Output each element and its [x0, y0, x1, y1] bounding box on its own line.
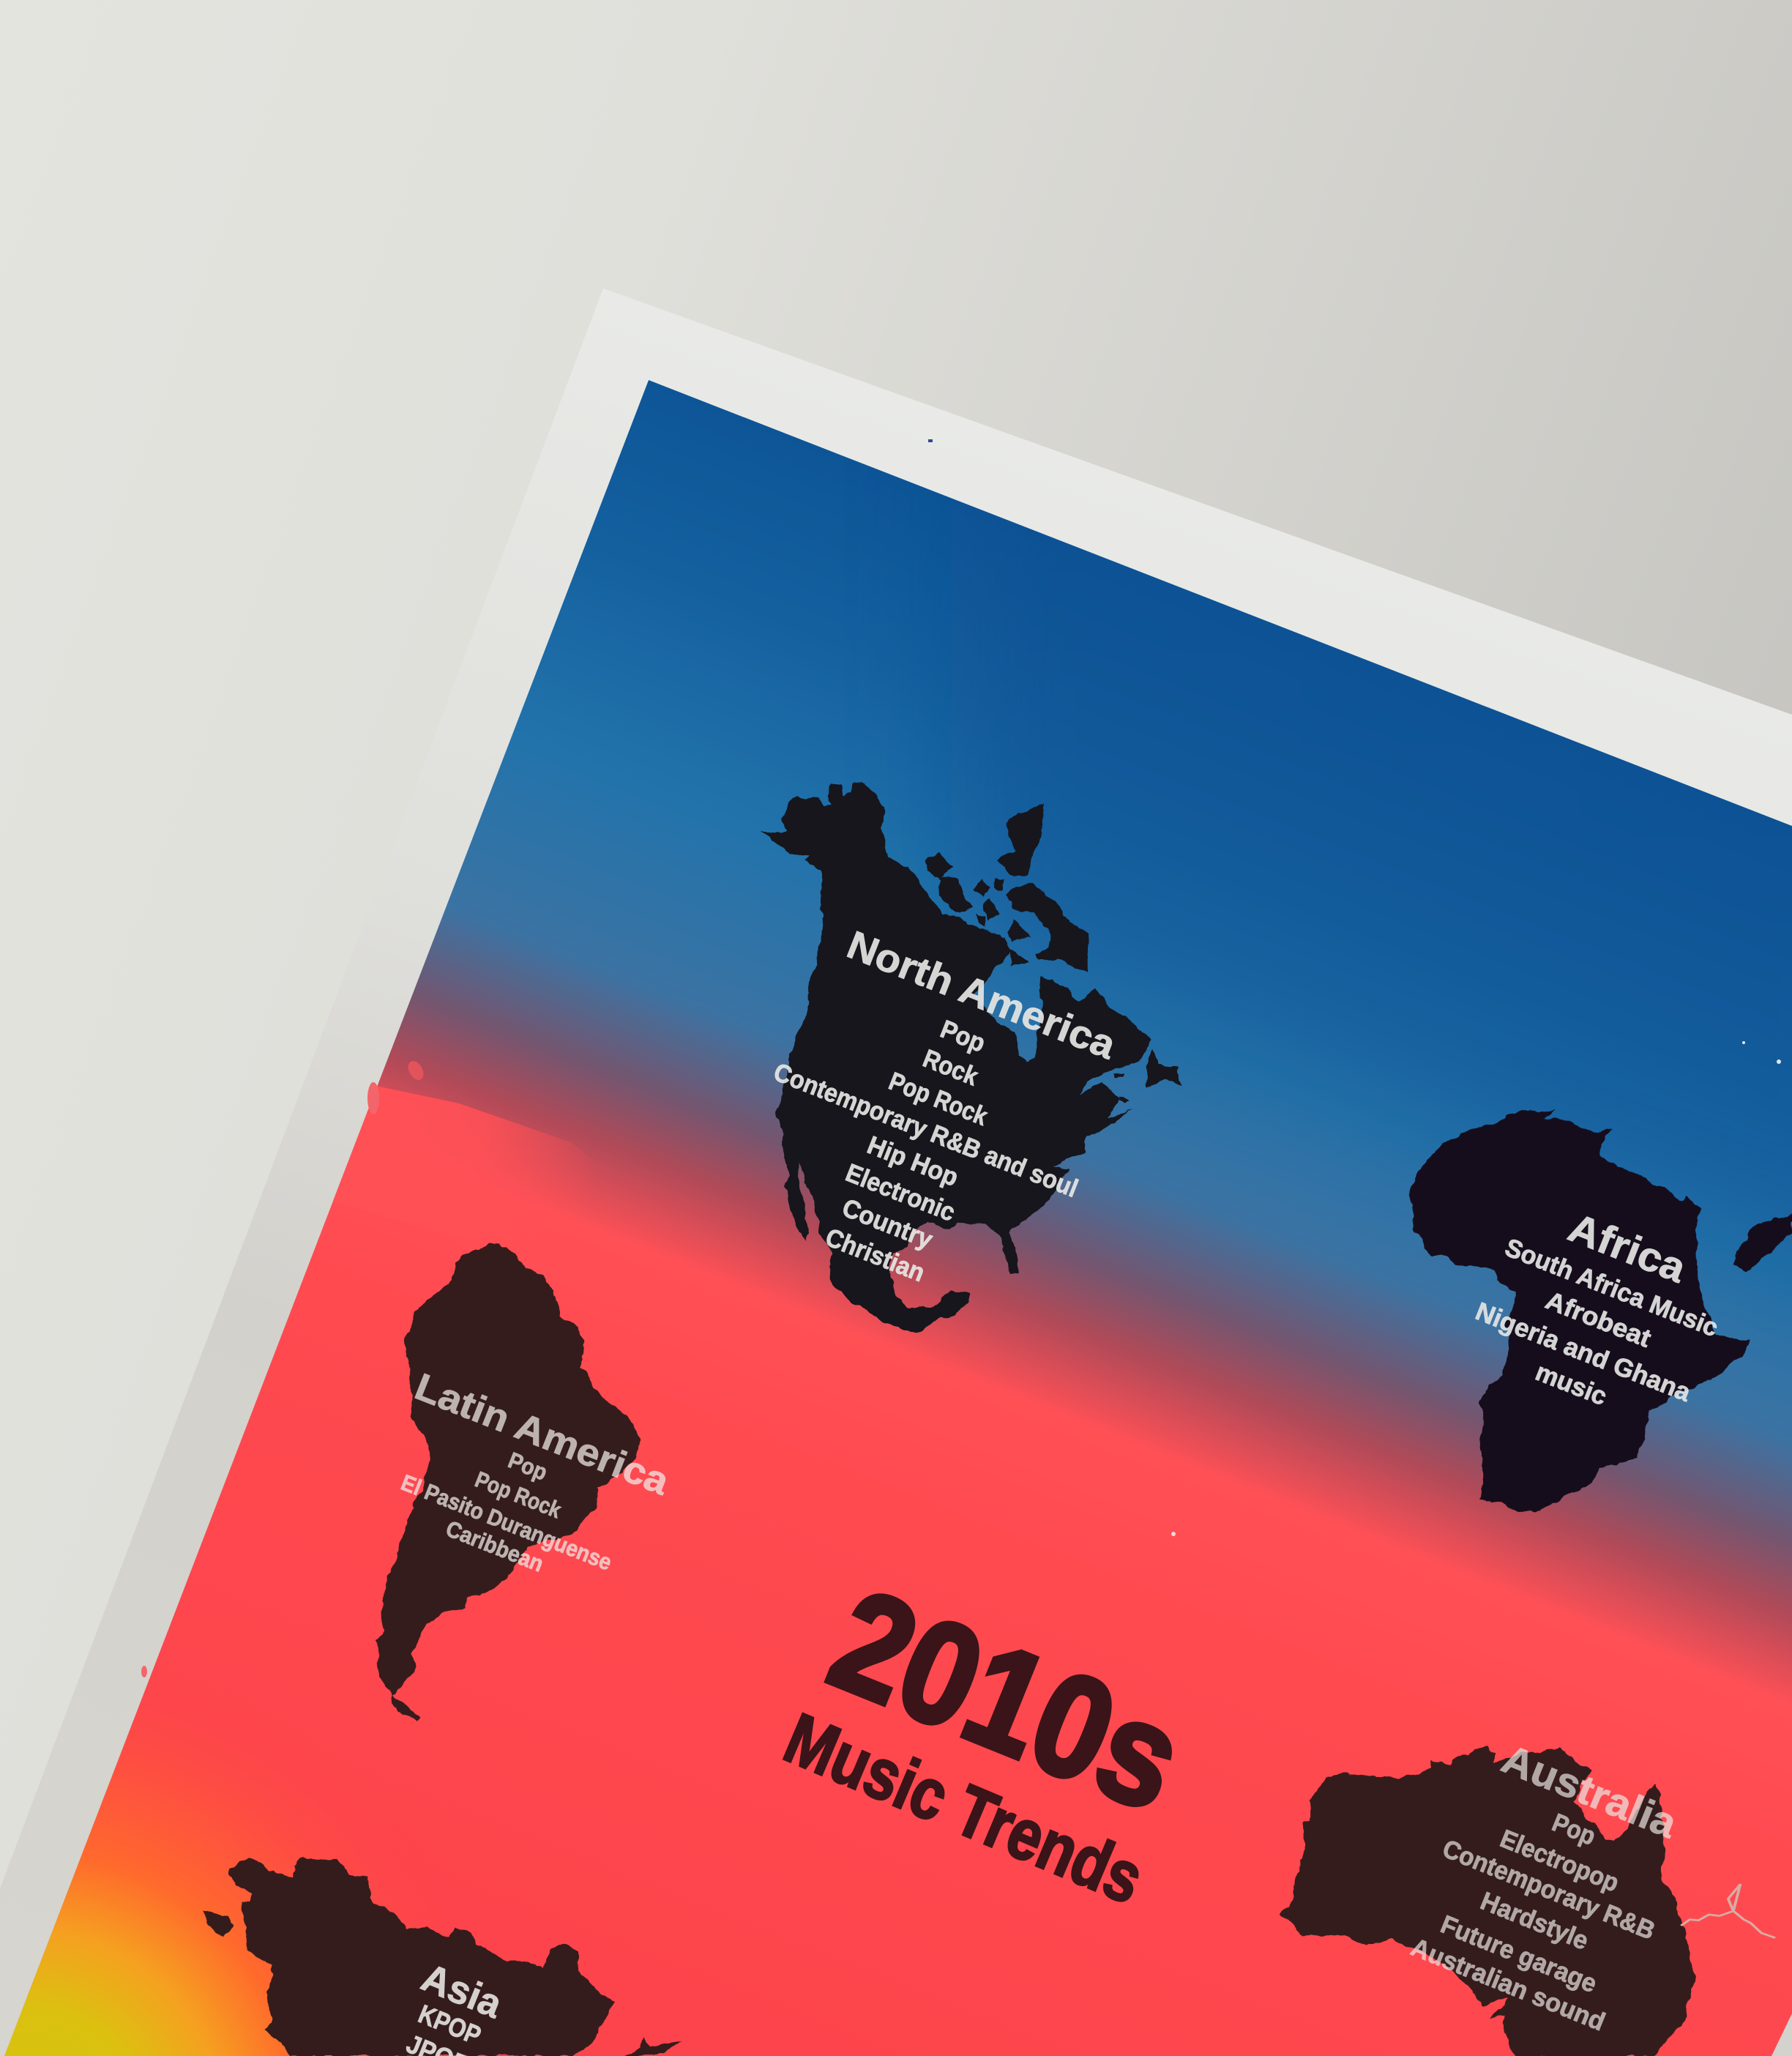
Australia labels: Australia — [1496, 1735, 1684, 1847]
Africa labels — [1459, 1183, 1741, 1440]
Latin America silhouette — [376, 1243, 642, 1721]
North America labels — [720, 915, 1138, 1328]
continent: North America — [720, 783, 1181, 1333]
North America labels: Hip Hop — [863, 1131, 963, 1192]
Africa labels: Africa — [1562, 1204, 1693, 1292]
North America silhouette — [759, 783, 1181, 1333]
Latin America labels: El Pasito Duranguense — [397, 1470, 616, 1576]
Australia labels: Pop — [1548, 1808, 1599, 1851]
Asia labels — [392, 1956, 509, 2056]
North America labels: Christian — [821, 1223, 929, 1287]
continent: Australia — [1281, 1727, 1702, 2056]
Latin America labels: Pop — [504, 1447, 550, 1486]
heading: 2010s: 2010s — [811, 1558, 1203, 1841]
Australia labels: Contemporary R&B — [1438, 1834, 1659, 1945]
Australia silhouette — [1281, 1748, 1695, 2056]
main title — [774, 1558, 1203, 1919]
Asia silhouette — [203, 1858, 684, 2056]
Asia labels: Asia — [416, 1956, 509, 2027]
North America labels: Rock — [919, 1044, 982, 1092]
North America labels: Country — [838, 1193, 937, 1254]
Africa labels: South Africa Music — [1501, 1233, 1722, 1343]
Africa labels: music — [1531, 1357, 1610, 1411]
Latin America labels: Caribbean — [442, 1516, 547, 1577]
Latin America labels — [367, 1366, 676, 1609]
Africa labels: Afrobeat — [1542, 1286, 1655, 1353]
North America labels: North America — [841, 923, 1122, 1068]
paper crack mark — [1681, 1884, 1775, 1938]
continent: Asia — [203, 1858, 684, 2056]
Australia labels: Future garage — [1437, 1910, 1601, 1998]
Australia labels — [1400, 1727, 1702, 2041]
subheading: Music Trends: Music Trends — [774, 1697, 1154, 1919]
Australia labels: Australian sound — [1407, 1933, 1609, 2036]
Latin America labels: Latin America — [409, 1366, 676, 1504]
Australia labels: Hardstyle — [1476, 1887, 1592, 1956]
North America labels: Pop Rock — [885, 1067, 992, 1131]
Asia labels: KPOP — [414, 1999, 485, 2051]
North America labels: Contemporary R&B and soul — [769, 1057, 1082, 1203]
North America labels: Pop — [936, 1015, 989, 1058]
continent: Latin America — [367, 1243, 676, 1721]
North America labels: Electronic — [842, 1158, 959, 1227]
Latin America labels: Pop Rock — [471, 1467, 565, 1524]
continent: Africa — [1410, 1109, 1792, 1513]
Africa silhouette — [1410, 1109, 1792, 1513]
Africa labels: Nigeria and Ghana — [1471, 1297, 1695, 1407]
Australia labels: Electropop — [1496, 1824, 1623, 1898]
